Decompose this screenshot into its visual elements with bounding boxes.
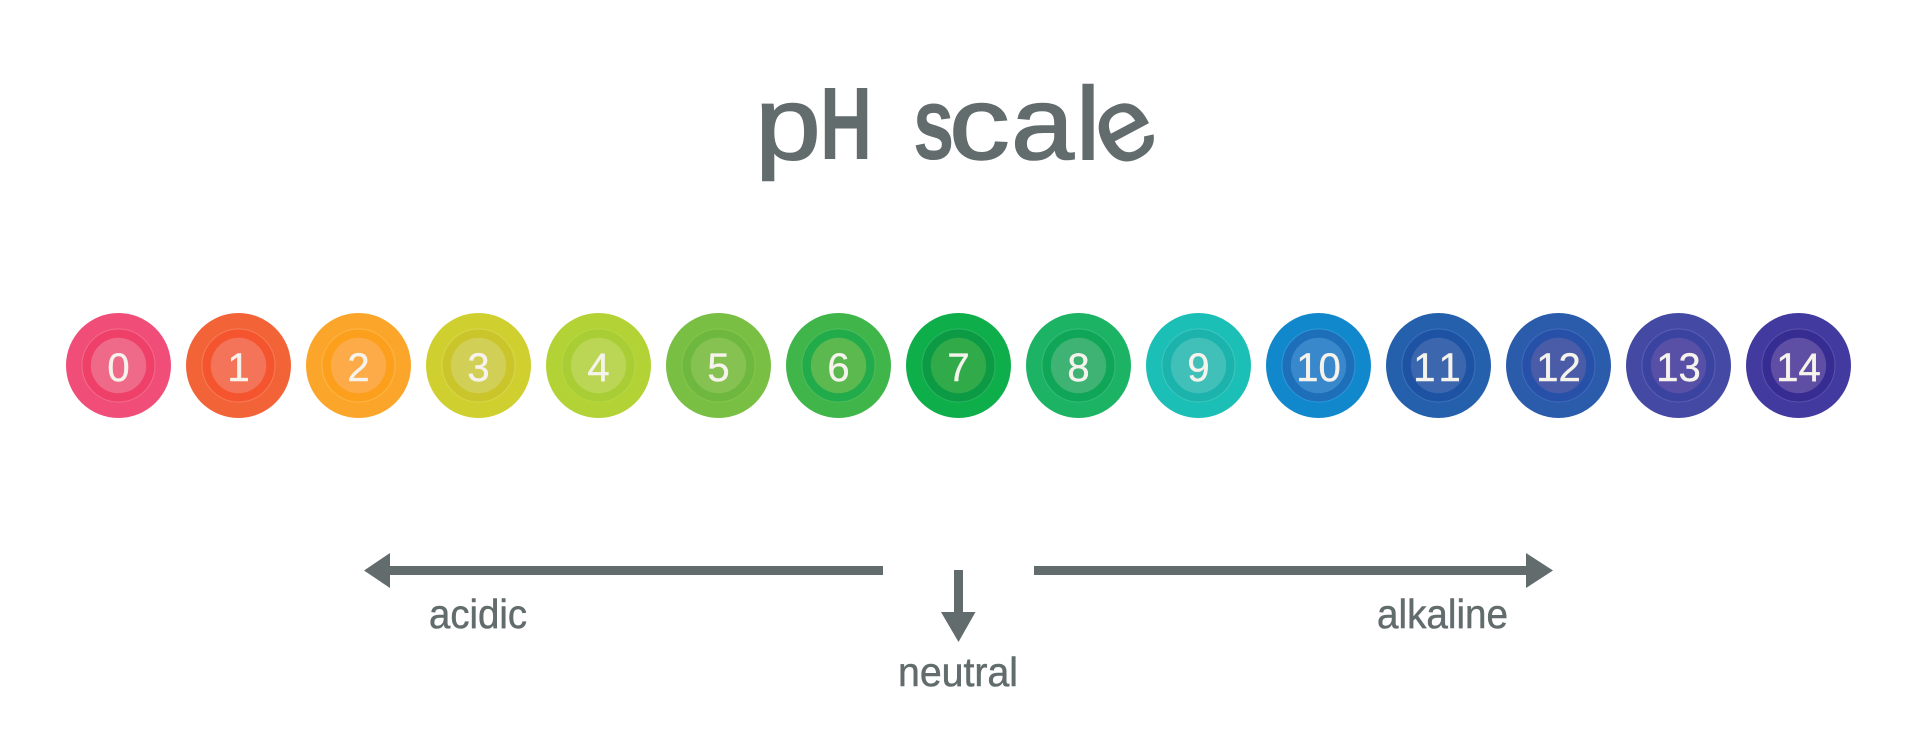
pH circle 2: 2 <box>347 346 370 390</box>
pH circle 13: 13 <box>1656 346 1701 390</box>
title: p <box>755 66 821 181</box>
pH circle 1 <box>186 313 291 418</box>
pH circle 9 <box>1146 313 1251 418</box>
title: c <box>949 66 1010 181</box>
label: acidic: acidic <box>429 591 527 637</box>
arrow: acidic <box>364 553 883 588</box>
pH circle 10: 10 <box>1296 346 1341 390</box>
pH circle 7 <box>906 313 1011 418</box>
pH circle 9: 9 <box>1187 346 1210 390</box>
pH circle 10 <box>1266 313 1371 418</box>
pH circle 5 <box>666 313 771 418</box>
pH circle 0 <box>66 313 171 418</box>
pH circle 6: 6 <box>827 346 850 390</box>
pH circle 13 <box>1626 313 1731 418</box>
pH circle 4 <box>546 313 651 418</box>
pH circle 0: 0 <box>107 346 130 390</box>
pH circle 2 <box>306 313 411 418</box>
pH circle 14 <box>1746 313 1851 418</box>
arrow: neutral <box>941 570 976 642</box>
pH circle 7: 7 <box>947 346 970 390</box>
pH circle 4: 4 <box>587 346 610 390</box>
pH circle 14: 14 <box>1776 346 1821 390</box>
pH circle 3 <box>426 313 531 418</box>
pH circle 3: 3 <box>467 346 490 390</box>
label: neutral: neutral <box>898 649 1018 695</box>
pH circle 12 <box>1506 313 1611 418</box>
title: l <box>1076 66 1100 181</box>
title: e <box>1070 61 1174 189</box>
pH circle 5: 5 <box>707 346 730 390</box>
pH circle 1: 1 <box>227 346 250 390</box>
label: alkaline: alkaline <box>1377 591 1508 637</box>
pH circle 12: 12 <box>1536 346 1581 390</box>
title <box>755 61 1174 189</box>
pH circle 11 <box>1386 313 1491 418</box>
title: s <box>913 66 954 181</box>
arrow: alkaline <box>1034 553 1553 588</box>
pH circle 11: 11 <box>1413 346 1464 390</box>
pH circle 8 <box>1026 313 1131 418</box>
pH circle 6 <box>786 313 891 418</box>
pH circle 8: 8 <box>1067 346 1090 390</box>
title: a <box>1011 66 1074 181</box>
title: H <box>820 66 872 181</box>
